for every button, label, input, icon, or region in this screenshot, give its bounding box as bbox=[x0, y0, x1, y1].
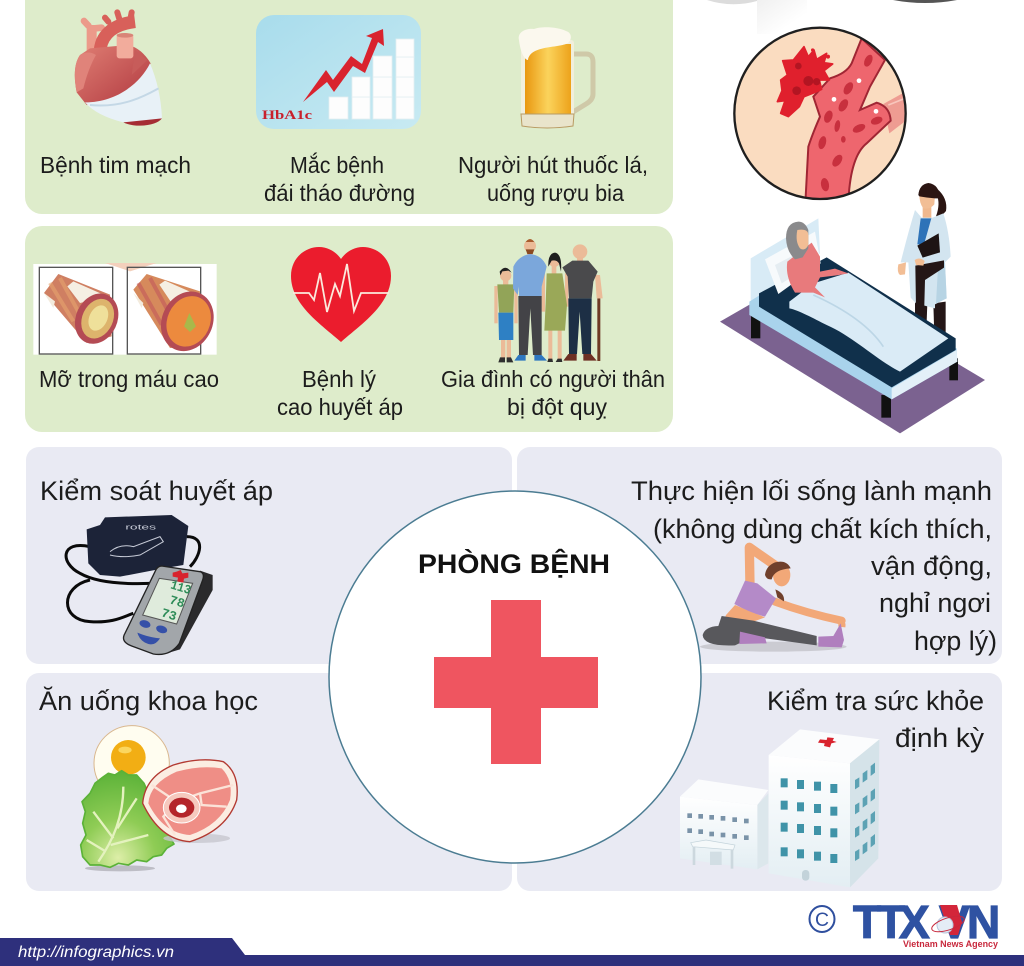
icon: blood pressure monitor: 73 bbox=[159, 605, 178, 624]
heading: hợp lý) bbox=[914, 626, 997, 656]
patient bbox=[786, 222, 848, 297]
central circle: prevention bbox=[329, 491, 701, 863]
heading bbox=[767, 686, 985, 753]
label: Bệnh tim mạch bbox=[40, 152, 191, 178]
icon: bandaged heart bbox=[75, 12, 162, 126]
icon: egg, lettuce and meat bbox=[81, 726, 237, 871]
icon: HbA1c sugar chart: HbA1c bbox=[262, 108, 313, 122]
heading: định kỳ bbox=[895, 723, 985, 753]
label: uống rượu bia bbox=[487, 180, 624, 206]
heading: Thực hiện lối sống lành mạnh bbox=[631, 476, 992, 506]
footer bar bbox=[0, 938, 1024, 966]
icon: blood pressure monitor: 78 bbox=[168, 593, 187, 611]
heading bbox=[631, 476, 997, 656]
heading: (không dùng chất kích thích, bbox=[653, 514, 992, 544]
heading: nghỉ ngơi bbox=[879, 588, 991, 618]
icon: blood pressure monitor bbox=[66, 515, 213, 654]
panel: regular health check bbox=[517, 673, 1002, 891]
heading: vận động, bbox=[871, 551, 992, 581]
icon: clogged arteries bbox=[33, 263, 223, 360]
label bbox=[458, 152, 648, 206]
panel: blood pressure control bbox=[26, 447, 512, 664]
label: Mắc bệnh bbox=[290, 152, 384, 178]
illustration: ruptured brain vessel bbox=[734, 28, 913, 203]
icon: family bbox=[494, 239, 603, 362]
label: bị đột quỵ bbox=[507, 394, 607, 420]
logo: TTXVN: TTXVN bbox=[853, 896, 1000, 948]
icon: HbA1c sugar chart bbox=[256, 15, 421, 129]
logo: TTXVN: C bbox=[815, 910, 829, 931]
heading: Ăn uống khoa học bbox=[39, 686, 258, 716]
heading: Kiểm soát huyết áp bbox=[40, 476, 273, 506]
panel: healthy eating bbox=[26, 673, 512, 891]
label: Gia đình có người thân bbox=[441, 366, 665, 392]
bed bbox=[749, 218, 957, 399]
label bbox=[277, 366, 403, 420]
icon: red cross bbox=[434, 600, 598, 764]
label: Mỡ trong máu cao bbox=[39, 366, 219, 392]
icon: beer mug bbox=[519, 27, 593, 128]
icon: blood pressure monitor: 113 bbox=[169, 578, 193, 598]
rug bbox=[720, 273, 985, 433]
heading: Kiểm tra sức khỏe bbox=[767, 686, 984, 716]
panel: healthy lifestyle bbox=[517, 447, 1002, 664]
illustration: patient in bed bbox=[720, 218, 985, 433]
label: cao huyết áp bbox=[277, 394, 403, 420]
label bbox=[264, 152, 415, 206]
label: Người hút thuốc lá, bbox=[458, 152, 648, 178]
heading: PHÒNG BỆNH bbox=[418, 548, 610, 579]
footer url: http://infographics.vn bbox=[18, 944, 174, 961]
bed legs bbox=[751, 315, 958, 418]
icon: hospital buildings bbox=[680, 729, 880, 887]
illustration: doctor bbox=[898, 183, 951, 333]
icon: stretching woman bbox=[700, 547, 847, 652]
label bbox=[441, 366, 665, 420]
panel: risk factors row 2 bbox=[25, 226, 673, 432]
logo: TTXVN: Vietnam News Agency bbox=[903, 939, 999, 950]
icon: blood pressure monitor: rotes bbox=[125, 522, 157, 531]
icon: heart with ECG bbox=[291, 247, 391, 342]
label: Bệnh lý bbox=[302, 366, 376, 392]
panel: risk factors row 1 bbox=[25, 0, 673, 214]
illustration: top head fragment bbox=[707, 0, 957, 34]
label: đái tháo đường bbox=[264, 180, 415, 206]
